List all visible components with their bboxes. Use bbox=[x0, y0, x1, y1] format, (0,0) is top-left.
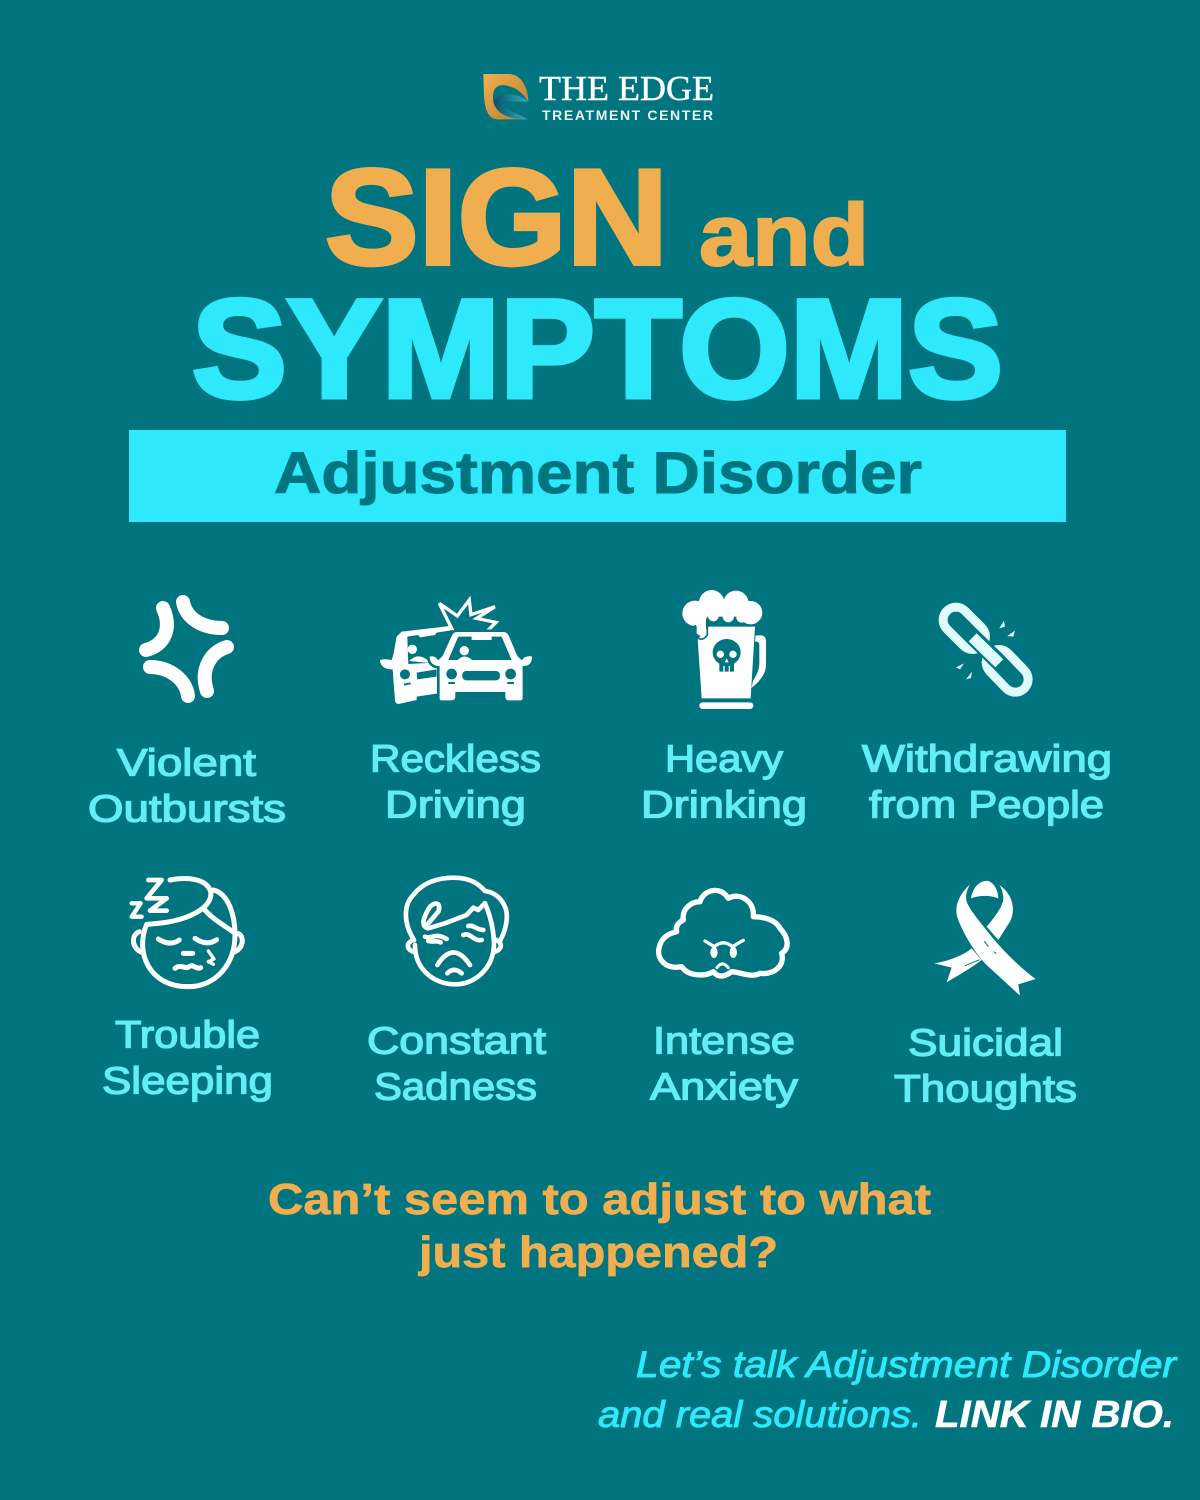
call to action question: just happened? bbox=[418, 1228, 778, 1277]
link in bio: LINK IN BIO. bbox=[935, 1394, 1174, 1436]
panel: Violent Outbursts bbox=[88, 602, 286, 830]
title word: SIGN: SIGN bbox=[325, 141, 668, 293]
subtitle text: Adjustment Disorder bbox=[274, 441, 922, 506]
label: Thoughts bbox=[894, 1068, 1077, 1110]
label: Withdrawing bbox=[862, 738, 1112, 780]
label: from People bbox=[869, 784, 1104, 826]
icon: broken chain bbox=[956, 620, 1015, 679]
label: Driving bbox=[385, 784, 526, 826]
footer note bbox=[598, 1344, 1178, 1436]
panel: Withdrawing from People bbox=[862, 620, 1112, 826]
label bbox=[862, 738, 1112, 826]
logo wordmark: THE EDGE bbox=[539, 69, 714, 108]
panel: Reckless Driving bbox=[370, 600, 541, 826]
label: Trouble bbox=[115, 1014, 260, 1056]
icon: sad face bbox=[406, 878, 507, 984]
icon: sleepless face bbox=[132, 879, 242, 987]
panel: Suicidal Thoughts bbox=[894, 881, 1077, 1110]
subtitle banner bbox=[129, 430, 1066, 522]
call to action question bbox=[268, 1175, 931, 1277]
label bbox=[650, 1020, 798, 1108]
label: Sadness bbox=[374, 1066, 537, 1108]
title bbox=[192, 141, 1003, 427]
label bbox=[641, 738, 807, 826]
logo bbox=[483, 69, 714, 123]
label: Intense bbox=[653, 1020, 795, 1062]
label: Constant bbox=[367, 1020, 547, 1062]
label: Suicidal bbox=[908, 1022, 1063, 1064]
label: Anxiety bbox=[650, 1066, 798, 1108]
footer note: and real solutions. bbox=[598, 1394, 922, 1435]
label bbox=[367, 1020, 547, 1108]
icon: logo mark bbox=[483, 74, 528, 119]
label: Reckless bbox=[370, 738, 541, 780]
icon: car crash bbox=[380, 600, 533, 704]
label: Drinking bbox=[641, 784, 807, 826]
title word: and: and bbox=[699, 187, 869, 284]
label: Violent bbox=[117, 742, 257, 784]
title word: SYMPTOMS: SYMPTOMS bbox=[192, 270, 1003, 427]
icon: awareness ribbon bbox=[934, 881, 1036, 996]
panel: Trouble Sleeping bbox=[102, 879, 273, 1102]
icon: angry cloud bbox=[659, 890, 787, 976]
panel: Intense Anxiety bbox=[650, 890, 798, 1108]
label: Heavy bbox=[665, 738, 783, 780]
label bbox=[894, 1022, 1077, 1110]
label: Outbursts bbox=[88, 788, 286, 830]
panel: Heavy Drinking bbox=[641, 590, 807, 826]
label bbox=[370, 738, 541, 826]
label bbox=[88, 742, 286, 830]
icon: anger mark bbox=[146, 602, 227, 696]
label: Sleeping bbox=[102, 1060, 273, 1102]
panel: Constant Sadness bbox=[367, 878, 547, 1108]
logo tagline: TREATMENT CENTER bbox=[542, 107, 713, 123]
footer note: Let’s talk Adjustment Disorder bbox=[636, 1344, 1178, 1385]
call to action question: Can’t seem to adjust to what bbox=[268, 1175, 931, 1224]
label bbox=[102, 1014, 273, 1102]
icon: beer mug with skull bbox=[682, 590, 766, 709]
